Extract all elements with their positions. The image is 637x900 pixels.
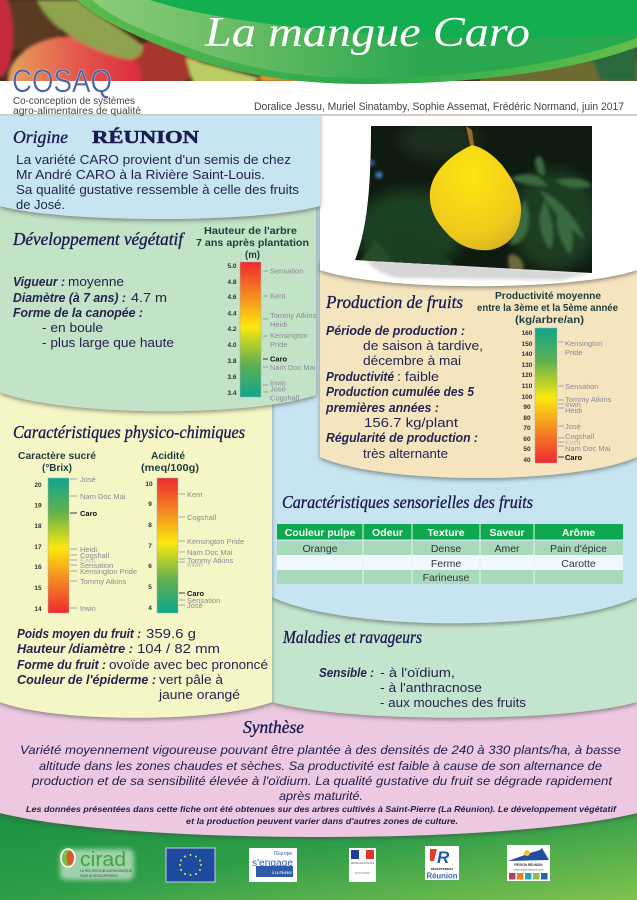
chart: acidité: 9 xyxy=(148,501,152,508)
chart: hauteur de l'arbre: 3.6 xyxy=(227,374,237,381)
logo: cirad: cirad xyxy=(80,849,126,871)
chart: hauteur de l'arbre: José xyxy=(270,384,286,394)
heading: origine: Origine xyxy=(13,127,68,147)
chart: caractère sucré: Caro xyxy=(80,509,98,518)
vegetative development text xyxy=(13,274,174,350)
chart: productivité moyenne: 50 xyxy=(523,446,531,453)
chart: hauteur de l'arbre: 7 ans après plantation xyxy=(196,238,309,249)
chart: hauteur de l'arbre: 3.4 xyxy=(227,390,237,397)
chart: hauteur de l'arbre: 4.4 xyxy=(227,310,237,318)
origin text: La variété CARO provient d'un semis de chez xyxy=(16,152,291,167)
logo: l'Europe s'engage xyxy=(249,848,297,882)
chart: productivité moyenne: 120 xyxy=(522,372,533,379)
logo: Département de la Réunion: R xyxy=(437,848,450,867)
logo: République française xyxy=(349,848,376,882)
fruit characteristics text: vert pâle à xyxy=(159,672,224,687)
logo: République française: MINISTÈRE xyxy=(355,870,370,875)
heading: maladies et ravageurs: Maladies et ravageurs xyxy=(282,627,422,647)
chart: productivité moyenne: 100 xyxy=(522,394,533,401)
panel: caractéristiques physico-chimiques xyxy=(0,380,272,718)
chart: hauteur de l'arbre: Hauteur de l'arbre xyxy=(204,226,297,237)
sensitivities list xyxy=(319,665,527,710)
chart: hauteur de l'arbre: 5.0 xyxy=(227,263,237,270)
sensory table: Farineuse xyxy=(423,572,470,584)
sensory table: Arôme xyxy=(562,527,595,539)
logo: Région Réunion: RÉGION RÉUNION xyxy=(514,862,543,867)
synthesis text: Variété moyennement vigoureuse pouvant être plantée à des densités de 240 à 330 plants/ha, à basse xyxy=(20,743,621,757)
sensory table: Texture xyxy=(427,527,465,539)
fruit characteristics text: Poids moyen du fruit : xyxy=(17,626,141,641)
chart: caractère sucré xyxy=(18,451,137,613)
sensitivities list: Sensible : xyxy=(319,665,374,680)
chart: hauteur de l'arbre: 4.2 xyxy=(227,326,237,333)
chart: productivité moyenne: Kent xyxy=(565,438,581,447)
chart: acidité: Acidité xyxy=(151,451,185,462)
chart: caractère sucré: Caractère sucré xyxy=(18,451,96,462)
production text: Productivité xyxy=(326,369,394,384)
region name: Réunion: RÉUNION xyxy=(92,126,199,147)
heading: synthèse: Synthèse xyxy=(243,717,304,737)
vegetative development text: Vigueur : xyxy=(13,274,65,289)
chart: hauteur de l'arbre: Irwin xyxy=(270,378,286,388)
origin text: Sa qualité gustative ressemble à celle des fruits xyxy=(16,182,300,197)
fruit characteristics text: 359.6 g xyxy=(146,626,196,641)
chart: caractère sucré: 19 xyxy=(34,502,42,510)
green banner xyxy=(77,0,637,84)
chart: hauteur de l'arbre: 4.0 xyxy=(227,342,237,349)
chart: caractère sucré: Kent xyxy=(80,556,96,565)
chart: acidité: Sensation xyxy=(187,596,220,605)
chart: acidité: Kensington Pride xyxy=(187,537,244,546)
chart: productivité moyenne: 70 xyxy=(523,425,531,432)
chart: productivité moyenne: entre la 3ème et la 5ème année xyxy=(477,303,618,314)
fruit characteristics text: 104 / 82 mm xyxy=(137,641,220,656)
white credits strip xyxy=(0,81,637,116)
chart: acidité: Nam Doc Mai xyxy=(187,548,233,557)
logo: l'Europe s'engage: à La Réunion xyxy=(272,870,292,875)
chart: hauteur de l'arbre: Pride xyxy=(270,340,288,349)
sensory table: Orange xyxy=(302,543,338,555)
sensory table: Odeur xyxy=(372,527,403,539)
production text: premières années : xyxy=(325,400,439,415)
chart: productivité moyenne: 80 xyxy=(523,415,531,422)
chart: hauteur de l'arbre: Caro xyxy=(270,354,288,364)
data note: et la production peuvent varier dans d'autres zones de culture. xyxy=(186,816,458,826)
sensory table: Couleur pulpe xyxy=(285,527,355,539)
logo: cirad: POUR LE DÉVELOPPEMENT xyxy=(80,873,119,878)
data note: Les données présentées dans cette fiche ont été obtenues sur des arbres cultivés à Saint-Pierre (La Réunion). Le développement végétatif xyxy=(26,804,617,814)
fruit characteristics text: Couleur de l'épiderme : xyxy=(17,672,156,687)
vegetative development text: Diamètre (à 7 ans) : xyxy=(13,290,126,305)
sensory table: Amer xyxy=(494,543,520,555)
chart: caractère sucré: 16 xyxy=(34,564,42,571)
title: La mangue Caro xyxy=(204,10,530,56)
chart: hauteur de l'arbre: 4.8 xyxy=(227,279,237,286)
chart: caractère sucré: Sensation xyxy=(80,561,113,570)
chart: productivité moyenne: Heidi xyxy=(565,406,582,415)
synthesis text: production et de sa sensibilité élevée à l'oïdium. La qualité gustative du fruit se dégrade rapidement xyxy=(31,774,613,788)
chart: productivité moyenne: 40 xyxy=(523,457,531,464)
heading: production de fruits: Production de fruits xyxy=(325,292,463,312)
chart: productivité moyenne: 110 xyxy=(522,383,533,390)
chart: caractère sucré: José xyxy=(80,475,96,484)
chart: productivité moyenne: Tommy Atkins xyxy=(565,395,612,404)
logo: l'Europe s'engage: s'engage xyxy=(252,858,293,869)
logo: Département de la Réunion: DÉPARTEMENT xyxy=(431,866,453,871)
chart: productivité moyenne: Cogshall xyxy=(565,432,595,441)
footer band with partner logos xyxy=(0,800,637,900)
logo: COSAQ: agro-alimentaires de qualité xyxy=(13,105,141,117)
chart: acidité: 4 xyxy=(148,605,152,612)
heading: caractéristiques physico-chimiques: Caractéristiques physico-chimiques xyxy=(13,422,245,442)
logo: COSAQ xyxy=(12,63,141,117)
chart: acidité: 8 xyxy=(148,522,152,529)
panel: origine xyxy=(0,112,320,219)
chart: acidité xyxy=(141,451,244,613)
chart: acidité: Caro xyxy=(187,589,205,598)
production text: Régularité de production : xyxy=(326,430,478,445)
chart: hauteur de l'arbre: 4.6 xyxy=(227,294,237,301)
sensitivities list: - aux mouches des fruits xyxy=(380,695,527,710)
panel: photo of the Caro mango xyxy=(320,110,637,286)
chart: productivité moyenne: 140 xyxy=(522,351,533,358)
sensitivities list: - à l'oïdium, xyxy=(380,665,455,680)
synthesis text: altitude dans les zones chaudes et sèches. Sa productivité est faible à cause de son alternance de xyxy=(39,759,602,773)
sensory table xyxy=(277,524,623,584)
sensory table: Pain d'épice xyxy=(550,543,607,555)
logo: COSAQ: Co-conception de systèmes xyxy=(13,95,135,107)
chart: hauteur de l'arbre: Sensation xyxy=(270,266,303,276)
production text: 156.7 kg/plant xyxy=(364,415,458,430)
fruit characteristics text xyxy=(17,626,268,702)
vegetative development text: Forme de la canopée : xyxy=(13,305,143,320)
chart: hauteur de l'arbre: Tommy Atkins xyxy=(270,311,317,320)
sensory table: Saveur xyxy=(489,527,525,539)
logo: République française: RÉPUBLIQUE FRANÇAISE xyxy=(351,860,374,865)
chart: acidité: Tommy Atkins xyxy=(187,556,234,565)
authors: Doralice Jessu, Muriel Sinatamby, Sophie Assemat, Frédéric Normand, juin 2017 xyxy=(254,101,624,113)
chart: productivité moyenne: José xyxy=(565,422,581,431)
chart: productivité moyenne: 130 xyxy=(522,362,533,369)
chart: caractère sucré: 14 xyxy=(34,606,42,613)
chart: hauteur de l'arbre: 3.8 xyxy=(227,358,237,365)
production text: Production cumulée des 5 xyxy=(326,384,475,399)
vegetative development text: - en boule xyxy=(42,320,103,335)
fruit characteristics text: jaune orangé xyxy=(158,687,240,702)
fruit characteristics text: Forme du fruit : xyxy=(17,657,106,672)
fruit characteristics text: Hauteur /diamètre : xyxy=(17,641,133,656)
chart: productivité moyenne: Kensington xyxy=(565,339,603,348)
chart: caractère sucré: (°Brix) xyxy=(42,463,72,474)
sensory table: Dense xyxy=(431,543,461,555)
sensitivities list: - à l'anthracnose xyxy=(380,680,482,695)
chart: hauteur de l'arbre: Kent xyxy=(270,292,286,300)
sensory table: Ferme xyxy=(431,558,461,570)
chart: hauteur de l'arbre xyxy=(196,226,317,402)
data note xyxy=(26,804,617,826)
chart: caractère sucré: 17 xyxy=(34,544,42,551)
chart: acidité: José xyxy=(187,601,203,610)
logo: Département de la Réunion: Réunion xyxy=(426,870,458,880)
panel: synthèse xyxy=(0,680,637,837)
production text: décembre à mai xyxy=(363,353,461,368)
vegetative development text: - plus large que haute xyxy=(42,335,174,350)
chart: productivité moyenne xyxy=(477,291,618,464)
chart: productivité moyenne: 150 xyxy=(522,341,533,348)
chart: acidité: (meq/100g) xyxy=(141,463,199,474)
logo: cirad xyxy=(60,849,134,880)
production text: très alternante xyxy=(363,446,448,461)
synthesis text xyxy=(20,743,621,803)
chart: productivité moyenne: Nam Doc Mai xyxy=(565,444,611,453)
logo: Région Réunion xyxy=(507,845,550,881)
chart: acidité: 5 xyxy=(148,584,152,591)
chart: productivité moyenne: (kg/arbre/an) xyxy=(515,315,584,326)
chart: productivité moyenne: Productivité moyenne xyxy=(495,291,601,302)
chart: productivité moyenne: Irwin xyxy=(565,400,581,409)
origin text: de José. xyxy=(16,197,65,212)
sensory table: Carotte xyxy=(561,558,596,570)
chart: productivité moyenne: 60 xyxy=(523,436,531,443)
chart: productivité moyenne: Pride xyxy=(565,348,583,357)
chart: acidité: 7 xyxy=(148,543,152,550)
logo: European Union flag xyxy=(166,848,215,882)
chart: productivité moyenne: 90 xyxy=(523,404,531,411)
logo: cirad: LA RECHERCHE AGRONOMIQUE xyxy=(80,869,133,873)
production text: de saison à tardive, xyxy=(363,338,483,353)
chart: acidité: Irwin xyxy=(187,560,203,569)
vegetative development text: 4.7 m xyxy=(131,290,167,305)
logo: Région Réunion: www.regionreunion.com xyxy=(514,868,544,872)
chart: hauteur de l'arbre: Heidi xyxy=(270,320,287,329)
production text: Période de production : xyxy=(326,323,465,338)
production text: : faible xyxy=(397,369,439,384)
production text xyxy=(325,323,483,461)
chart: hauteur de l'arbre: (m) xyxy=(245,250,260,261)
chart: caractère sucré: Nam Doc Mai xyxy=(80,492,126,501)
icon: stem xyxy=(466,126,474,145)
photo xyxy=(355,126,592,273)
chart: acidité: 10 xyxy=(145,481,153,488)
panel: production de fruits xyxy=(320,260,637,478)
chart: caractère sucré: Irwin xyxy=(80,604,96,613)
chart: caractère sucré: 15 xyxy=(34,585,42,592)
chart: productivité moyenne: 160 xyxy=(522,330,533,337)
panel: caractéristiques sensorielles xyxy=(272,200,637,623)
panel: développement végétatif xyxy=(0,200,317,411)
chart: productivité moyenne: Sensation xyxy=(565,382,598,391)
logo: COSAQ: COSAQ xyxy=(12,63,112,99)
chart: hauteur de l'arbre: Nam Doc Mai xyxy=(270,363,316,372)
synthesis text: après maturité. xyxy=(279,789,363,803)
chart: caractère sucré: Heidi xyxy=(80,545,97,554)
mango fruit xyxy=(430,145,521,250)
chart: acidité: Cogshall xyxy=(187,513,217,522)
panel: maladies et ravageurs xyxy=(272,580,637,718)
logo: l'Europe s'engage: l'Europe xyxy=(274,851,292,857)
chart: caractère sucré: 20 xyxy=(34,482,42,489)
chart: acidité: 6 xyxy=(148,563,152,570)
chart: hauteur de l'arbre: Kensington xyxy=(270,331,308,340)
origin text: Mr André CARO à la Rivière Saint-Louis. xyxy=(16,167,265,182)
chart: caractère sucré: 18 xyxy=(34,523,42,530)
origin text xyxy=(16,152,300,212)
chart: caractère sucré: Kensington Pride xyxy=(80,567,137,576)
header: fruit photo and green banner xyxy=(0,0,637,84)
heading: développement végétatif: Développement végétatif xyxy=(12,229,186,249)
logo: Département de la Réunion xyxy=(425,846,459,880)
chart: caractère sucré: Cogshall xyxy=(80,551,110,560)
chart: acidité: Kent xyxy=(187,490,203,499)
fruit photo xyxy=(0,0,637,81)
chart: caractère sucré: Tommy Atkins xyxy=(80,577,127,586)
chart: productivité moyenne: Caro xyxy=(565,453,583,462)
vegetative development text: moyenne xyxy=(68,274,124,289)
chart: hauteur de l'arbre: Cogshall xyxy=(270,394,300,402)
heading: caractéristiques sensorielles: Caractéristiques sensorielles des fruits xyxy=(282,492,533,512)
fruit characteristics text: ovoïde avec bec prononcé xyxy=(109,657,268,672)
